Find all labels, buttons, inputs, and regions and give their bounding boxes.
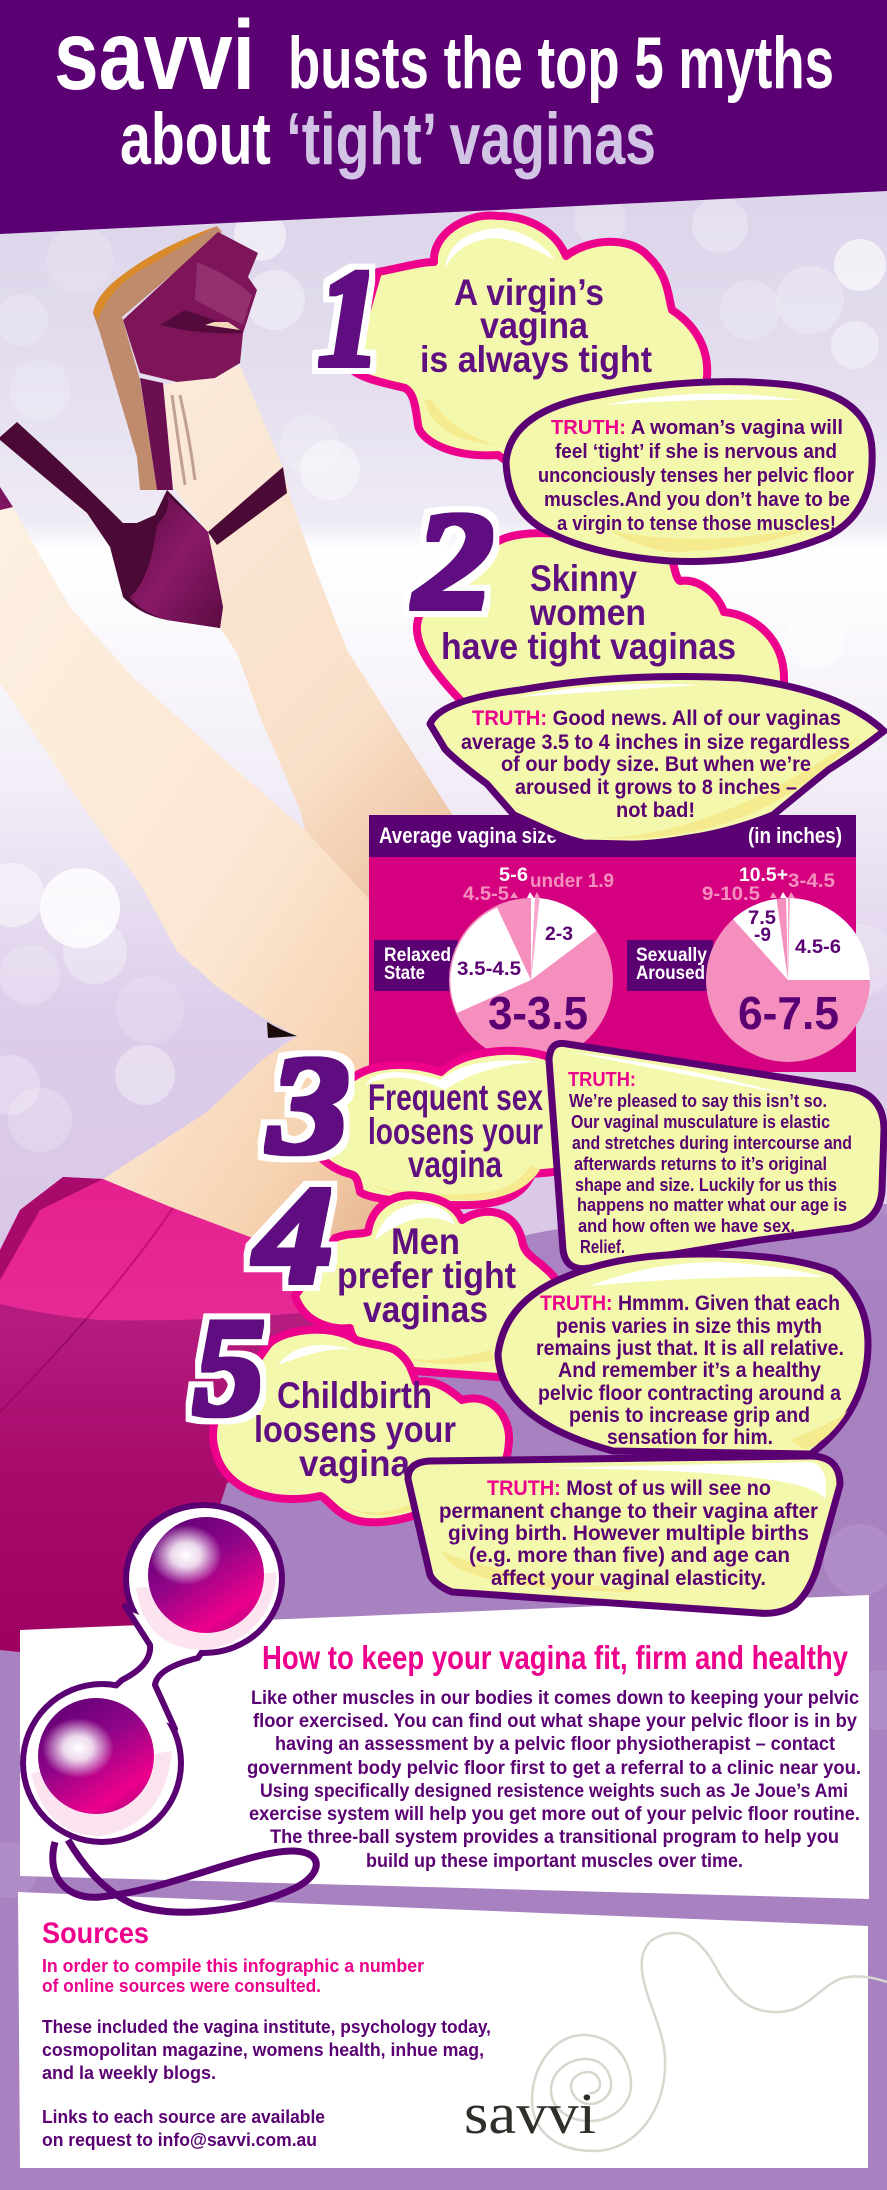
number 1: 1	[318, 241, 380, 396]
truth 1 text: muscles.And you don’t have to be	[544, 489, 850, 511]
truth 4 bubble	[498, 1254, 868, 1454]
lower bokeh	[0, 1380, 887, 1898]
myth 5 title: Childbirth	[277, 1375, 432, 1416]
pie chart: relaxed: 3-3.5	[488, 987, 588, 1039]
truth 5 bubble	[408, 1456, 840, 1613]
title: savvi	[54, 0, 255, 110]
text: sources intro	[42, 1956, 424, 1996]
truth 1 text: unconciously tenses her pelvic floor	[538, 465, 854, 487]
truth 4 text: penis varies in size this myth	[556, 1315, 822, 1338]
icon: kegel balls	[20, 1502, 316, 1912]
myth 5 title: loosens your	[254, 1409, 456, 1450]
truth 1 text	[538, 417, 854, 535]
myth 3 title: vagina	[408, 1144, 502, 1185]
truth 5 text: affect your vaginal elasticity.	[491, 1567, 766, 1590]
panel: how to keep fit	[20, 1595, 869, 1899]
truth 4 text	[536, 1292, 844, 1449]
background: purple lower overlay	[0, 1204, 887, 2190]
myth 4 title: prefer tight	[337, 1255, 516, 1296]
myth 2 title: women	[529, 592, 646, 633]
truth 4 text: remains just that. It is all relative.	[536, 1337, 844, 1360]
pie chart: relaxed: 2-3	[545, 924, 573, 945]
photo: foreground leg and torso	[0, 507, 500, 1270]
truth 3 text: We’re pleased to say this isn’t so.	[569, 1091, 827, 1111]
pie chart: aroused: 10.5+	[739, 865, 788, 886]
title: about ‘tight’ vaginas	[120, 99, 656, 180]
myth 4 title: vaginas	[363, 1289, 488, 1330]
truth 2 text: of our body size. But when we’re	[501, 753, 811, 776]
chart unit: (in inches)	[748, 823, 842, 848]
truth 2 text: average 3.5 to 4 inches in size regardless	[461, 731, 850, 754]
myth 5 title	[254, 1375, 456, 1484]
pie chart: aroused: 6-7.5	[738, 987, 839, 1039]
photo: pink dress	[0, 1177, 440, 1660]
myth 1 title: is always tight	[420, 339, 652, 380]
truth 3 text: TRUTH:	[568, 1069, 636, 1091]
pie chart: aroused: 7.5	[748, 908, 776, 929]
myth 4 title	[337, 1221, 516, 1330]
truth 4 text: pelvic floor contracting around a	[538, 1382, 841, 1405]
myth 2 title: have tight vaginas	[441, 626, 736, 667]
pie chart: relaxed	[449, 865, 614, 1062]
heading: sources: Sources	[42, 1917, 149, 1950]
pie chart: relaxed: 4.5-5	[463, 884, 509, 905]
label: relaxed state: State	[384, 963, 425, 984]
text: advice body: government body pelvic floor first to get a referral to a clinic near you.	[247, 1758, 861, 1779]
text: advice body: Using specifically designed resistence weights such as Je Joue’s Ami	[260, 1781, 848, 1802]
label: relaxed state	[374, 940, 458, 991]
myth 4 cloud	[295, 1195, 559, 1380]
text: advice body: exercise system will help you get more out of your pelvic floor routine.	[249, 1804, 860, 1825]
myth 1 title: A virgin’s	[454, 272, 604, 313]
truth 3 text: Our vaginal musculature is elastic	[571, 1112, 830, 1132]
armpit shadow	[267, 1022, 297, 1038]
truth 1 bubble	[506, 382, 872, 561]
icon: swirl	[532, 1933, 887, 2151]
pie chart: relaxed: under 1.9	[530, 871, 614, 892]
text: advice body	[247, 1688, 861, 1872]
pie chart: aroused: 9-10.5	[702, 884, 760, 905]
number 2: 2	[412, 484, 494, 639]
truth 1 text: TRUTH: A woman’s vagina will	[551, 417, 843, 439]
truth 4 text: TRUTH: Hmmm. Given that each	[540, 1292, 840, 1315]
text: advice body: floor exercised. You can find out what shape your pelvic floor is in by	[253, 1711, 857, 1732]
header band	[0, 0, 887, 234]
label: sexually aroused: Sexually	[636, 945, 707, 966]
text: sources list	[42, 2017, 491, 2150]
text: advice body: having an assessment by a pelvic floor physiotherapist – contact	[275, 1734, 836, 1755]
myth 1 title: vagina	[480, 305, 588, 346]
number 4: 4	[252, 1158, 333, 1313]
truth 4 text: penis to increase grip and	[569, 1404, 810, 1427]
text: advice body: Like other muscles in our bodies it comes down to keeping your pelvic	[251, 1688, 859, 1709]
truth 5 text: TRUTH: Most of us will see no	[487, 1477, 771, 1500]
text: advice body: build up these important muscles over time.	[366, 1851, 743, 1872]
truth 4 text: And remember it’s a healthy	[558, 1359, 821, 1382]
truth 4 text: sensation for him.	[607, 1426, 773, 1449]
truth 1 text: feel ‘tight’ if she is nervous and	[555, 441, 837, 463]
pie chart: aroused: 4.5-6	[795, 937, 841, 958]
myth 2 title: Skinny	[530, 558, 637, 599]
truth 3 text: Relief.	[580, 1237, 625, 1257]
pie chart: aroused: -9	[754, 925, 771, 946]
logo: savvi: savvi	[464, 2081, 596, 2146]
label: sexually aroused	[627, 940, 713, 991]
text: sources list: These included the vagina institute, psychology today,	[42, 2017, 491, 2037]
text: sources list: and la weekly blogs.	[42, 2063, 216, 2083]
truth 5 text: giving birth. However multiple births	[448, 1522, 809, 1545]
myth 3 title: Frequent sex	[368, 1077, 543, 1118]
myth 5 cloud	[213, 1330, 509, 1522]
text: advice body: The three-ball system provides a transitional program to help you	[270, 1827, 839, 1848]
text: sources list: cosmopolitan magazine, womens health, inhue mag,	[42, 2040, 484, 2060]
myth 3 cloud	[318, 1051, 600, 1205]
myth 3 title	[368, 1077, 543, 1185]
myth 3 title: loosens your	[368, 1111, 543, 1152]
truth 3 text	[568, 1069, 852, 1257]
pie chart: aroused	[702, 865, 870, 1062]
truth 3 text: and how often we have sex.	[578, 1216, 795, 1236]
text: sources list: on request to info@savvi.com.au	[42, 2130, 317, 2150]
chart heading: Average vagina size	[379, 823, 557, 848]
truth 2 text: TRUTH: Good news. All of our vaginas	[472, 707, 841, 730]
truth 3 bubble	[549, 1043, 884, 1269]
foot tendon shading	[172, 395, 195, 485]
panel: average vagina size chart	[369, 815, 870, 1072]
number 5: 5	[193, 1290, 265, 1445]
truth 1 text: a virgin to tense those muscles!	[557, 513, 836, 535]
title	[54, 0, 834, 180]
text: sources intro: In order to compile this infographic a number	[42, 1956, 424, 1976]
panel: sources	[18, 1892, 887, 2168]
text: sources intro: of online sources were consulted.	[42, 1976, 321, 1996]
photo: rear leg	[163, 365, 560, 1040]
truth 2 bubble	[430, 676, 884, 844]
myth 5 title: vagina	[299, 1443, 410, 1484]
myth 2 title	[441, 558, 736, 667]
pie chart: relaxed: 5-6	[499, 865, 528, 886]
label: relaxed state: Relaxed	[384, 945, 451, 966]
truth 5 text: permanent change to their vagina after	[439, 1500, 818, 1523]
truth 3 text: afterwards returns to it’s original	[574, 1154, 827, 1174]
truth 3 text: happens no matter what our age is	[577, 1195, 847, 1215]
truth 5 text: (e.g. more than five) and age can	[469, 1544, 790, 1567]
myth 1 title	[420, 272, 652, 380]
myth 1 cloud	[350, 216, 707, 470]
pie chart: relaxed: 3.5-4.5	[457, 959, 521, 980]
truth 2 text: not bad!	[616, 799, 695, 822]
truth 5 text	[439, 1477, 818, 1590]
truth 2 text	[461, 707, 850, 822]
label: sexually aroused: Aroused	[636, 963, 705, 984]
truth 2 text: aroused it grows to 8 inches –	[515, 776, 797, 799]
pie chart: aroused: 3-4.5	[788, 871, 835, 892]
text: sources list: Links to each source are available	[42, 2107, 325, 2127]
myth 2 cloud	[417, 533, 784, 710]
truth 3 text: shape and size. Luckily for us this	[575, 1175, 837, 1195]
number 3: 3	[266, 1028, 350, 1183]
myth 4 title: Men	[391, 1221, 460, 1262]
photo: high-heeled shoe	[0, 226, 287, 628]
truth 3 text: and stretches during intercourse and	[572, 1133, 852, 1153]
